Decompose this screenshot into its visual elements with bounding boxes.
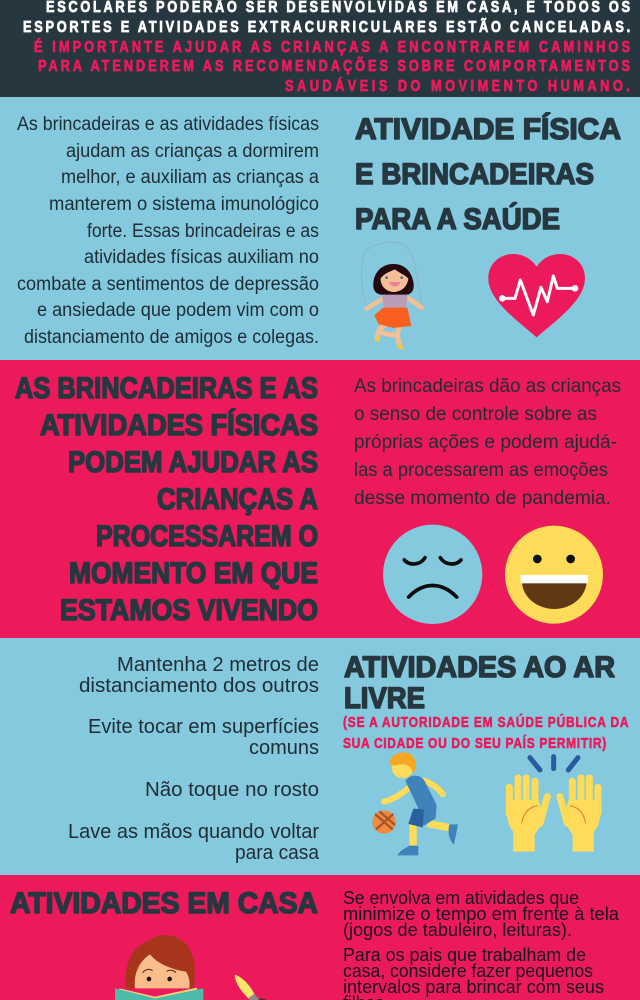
- subtitle: autoridade em saúde: SUA CIDADE OU DO SEU PAÍS PERMITIR): [343, 735, 606, 751]
- heading: atividade física: ATIVIDADE FÍSICA: [355, 112, 621, 146]
- body text: senso de controle: As brincadeiras dão as crianças: [354, 376, 621, 397]
- icon: sad face: [383, 525, 482, 624]
- body text: tempo de tela: minimize o tempo em frente à tela: [343, 904, 620, 924]
- body text: tempo de tela: intervalos para brincar com seus: [343, 977, 604, 997]
- list: recomendações: Evite tocar em superfícies: [88, 716, 319, 738]
- panel: atividades ao ar livre: [0, 638, 640, 875]
- body text: tempo de tela: Se envolva em atividades que: [343, 888, 579, 908]
- heading: ar livre: ATIVIDADES AO AR: [344, 651, 615, 684]
- body text: benefícios: distanciamento de amigos e colegas.: [24, 327, 319, 348]
- heading: brincadeiras e emoções: ESTAMOS VIVENDO: [60, 594, 318, 627]
- panel: atividade física e saúde: [0, 97, 640, 360]
- body text: senso de controle: próprias ações e podem ajudá-: [354, 432, 617, 453]
- intro text white: [23, 0, 630, 36]
- body text: benefícios: forte. Essas brincadeiras e as: [87, 221, 319, 242]
- body text: senso de controle: o senso de controle sobre as: [354, 404, 597, 425]
- list: recomendações: distanciamento dos outros: [79, 675, 319, 697]
- intro text pink: SAUDÁVEIS DO MOVIMENTO HUMANO.: [285, 77, 630, 95]
- heading: brincadeiras e emoções: AS BRINCADEIRAS E AS: [15, 372, 318, 405]
- body text: benefícios: manterem o sistema imunológico: [49, 194, 319, 215]
- body text: senso de controle: [354, 376, 621, 509]
- icon: heart with pulse: [488, 254, 585, 337]
- intro text pink: É IMPORTANTE AJUDAR AS CRIANÇAS A ENCONTRAREM CAMINHOS: [34, 38, 630, 56]
- list: recomendações: Não toque no rosto: [145, 779, 319, 801]
- heading: atividade física: [355, 112, 621, 236]
- icon: paint brush: [235, 975, 267, 1000]
- heading: brincadeiras e emoções: PROCESSAREM O: [96, 520, 318, 553]
- list: recomendações: para casa: [235, 842, 320, 864]
- body text: benefícios: ajudam as crianças a dormirem: [66, 141, 319, 162]
- body text: senso de controle: desse momento de pandemia.: [354, 488, 611, 509]
- heading: atividade física: PARA A SAÚDE: [355, 202, 560, 236]
- list: recomendações: Mantenha 2 metros de: [117, 654, 319, 676]
- body text: tempo de tela: casa, considere fazer pequenos: [343, 961, 593, 981]
- heading: brincadeiras e emoções: MOMENTO EM QUE: [69, 557, 318, 590]
- body text: tempo de tela: [343, 888, 620, 1000]
- heading: em casa: ATIVIDADES EM CASA: [10, 887, 318, 920]
- heading: brincadeiras e emoções: [15, 372, 318, 627]
- panel: processar o momento: [0, 360, 640, 638]
- list: recomendações: comuns: [249, 737, 319, 759]
- icon: raised hands: [506, 757, 601, 852]
- subtitle: autoridade em saúde: (SE A AUTORIDADE EM SAÚDE PÚBLICA DA: [343, 714, 629, 730]
- body text: benefícios: [17, 114, 319, 348]
- icon: girl reading book: [115, 935, 203, 1000]
- body text: tempo de tela: (jogos de tabuleiro, leituras).: [343, 920, 572, 940]
- heading: brincadeiras e emoções: PODEM AJUDAR AS: [68, 446, 318, 479]
- icon: boy with basketball: [372, 752, 458, 855]
- body text: benefícios: e ansiedade que podem vim com o: [37, 300, 319, 321]
- subtitle: autoridade em saúde: [343, 714, 629, 751]
- list: recomendações: [68, 654, 320, 864]
- heading: ar livre: [344, 651, 615, 715]
- body text: benefícios: combate a sentimentos de depressão: [17, 274, 319, 295]
- icon: girl jumping rope: [361, 242, 422, 350]
- panel: intro: [0, 0, 640, 97]
- panel: atividades em casa: [0, 875, 640, 1000]
- heading: brincadeiras e emoções: ATIVIDADES FÍSICAS: [40, 408, 318, 442]
- body text: senso de controle: las a processarem as emoções: [354, 460, 608, 481]
- body text: tempo de tela: Para os pais que trabalham de: [343, 945, 586, 965]
- icon: happy face: [505, 526, 603, 624]
- body text: benefícios: melhor, e auxiliam as crianças a: [61, 167, 319, 188]
- body text: benefícios: atividades físicas auxiliam no: [84, 247, 319, 268]
- heading: atividade física: E BRINCADEIRAS: [355, 158, 594, 191]
- intro text white: ESPORTES E ATIVIDADES EXTRACURRICULARES ESTÃO CANCELADAS.: [23, 17, 630, 36]
- heading: ar livre: LIVRE: [344, 682, 425, 715]
- body text: benefícios: As brincadeiras e as atividades físicas: [17, 114, 319, 135]
- intro text pink: PARA ATENDEREM AS RECOMENDAÇÕES SOBRE COMPORTAMENTOS: [38, 56, 630, 75]
- heading: brincadeiras e emoções: CRIANÇAS A: [157, 483, 318, 516]
- list: recomendações: Lave as mãos quando voltar: [68, 821, 319, 843]
- intro text pink: [34, 38, 630, 95]
